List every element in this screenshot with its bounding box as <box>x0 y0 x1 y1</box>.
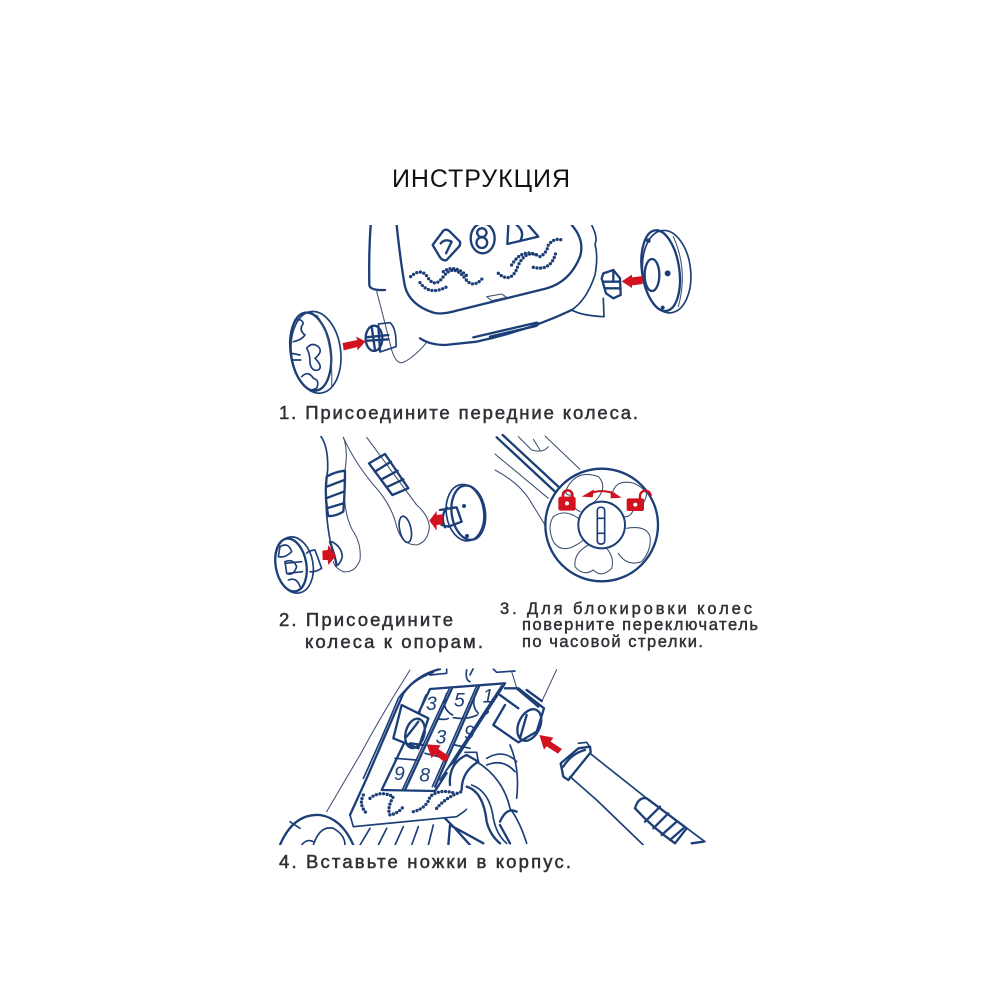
red arrow left <box>322 545 336 565</box>
illustration: step 4 insert legs <box>280 668 705 845</box>
left wheel <box>288 310 342 394</box>
center dial <box>578 502 625 548</box>
caption: step 2 <box>279 609 483 652</box>
right wheel <box>640 229 692 314</box>
keypad digits: 8 <box>419 766 430 787</box>
beaded tracks <box>411 239 563 291</box>
illustration: step 2 wheels to supports <box>271 437 489 596</box>
keypad digits: 1 <box>483 686 493 707</box>
right socket <box>493 688 546 745</box>
keypad buttons <box>433 223 538 260</box>
unlock icon <box>627 491 651 511</box>
left socket <box>393 705 428 750</box>
red arrow right <box>539 735 562 754</box>
caption: step 3: поверните переключатель <box>522 616 758 634</box>
left support leg <box>321 437 360 572</box>
keypad digits: 9 <box>464 723 475 744</box>
right support leg <box>343 437 429 545</box>
lock icon <box>558 489 576 511</box>
red arrow right <box>429 511 443 531</box>
caption: step 3: 3. Для блокировки колес <box>500 600 752 618</box>
keypad digits: 3 <box>426 694 437 715</box>
red arrow centre <box>427 744 449 762</box>
walker body <box>369 225 604 363</box>
caption: step 3 <box>500 600 758 651</box>
red arrow left <box>343 337 366 350</box>
keypad digits: 3 <box>436 727 447 748</box>
flower petals <box>550 474 650 574</box>
centre leg <box>447 752 527 845</box>
illustration: step 3 wheel lock <box>495 435 658 581</box>
lower body ribs and wheel <box>280 815 483 845</box>
double arrow <box>582 489 622 498</box>
illustration: step 1 front wheels <box>285 223 695 396</box>
left axle <box>366 323 396 352</box>
caption: step 2: колеса к опорам. <box>305 631 483 652</box>
keypad digits: 9 <box>394 764 405 785</box>
detached leg <box>561 742 705 845</box>
caption: step 1: 1. Присоедините передние колеса. <box>279 402 638 423</box>
keypad panel <box>382 683 505 791</box>
red arrow right <box>622 275 643 288</box>
right axle <box>602 270 621 298</box>
keypad digits: 5 <box>454 691 465 712</box>
caption: step 2: 2. Присоедините <box>279 609 453 630</box>
beaded tracks <box>361 791 462 815</box>
support leg <box>495 435 580 525</box>
left wheel with axle <box>271 534 322 596</box>
body outline <box>327 668 557 827</box>
keypad digits <box>394 689 491 782</box>
right wheel with axle <box>440 482 489 543</box>
title: ИНСТРУКЦИЯ <box>392 165 570 193</box>
caption: step 4: 4. Вставьте ножки в корпус. <box>279 851 571 872</box>
wheel circle <box>545 469 658 581</box>
caption: step 3: по часовой стрелки. <box>522 633 703 651</box>
